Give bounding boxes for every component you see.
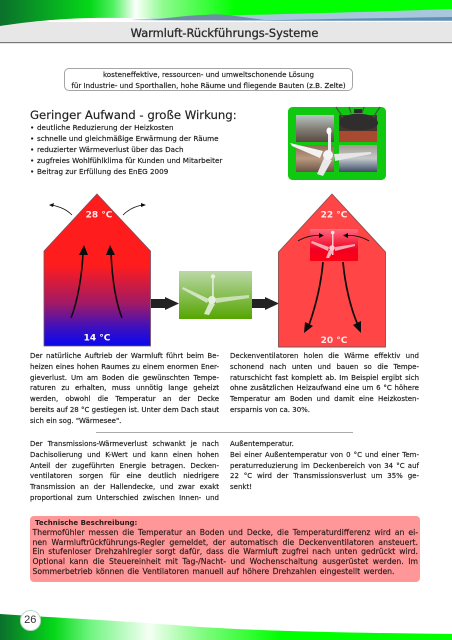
fan box: [179, 271, 252, 319]
benefits list: •: [30, 145, 34, 154]
header band: [0, 0, 452, 44]
footer band: [0, 614, 452, 640]
text block: ceiling fans: ersparnis von ca. 30%.: [230, 406, 310, 414]
benefits list: Beitrag zur Erfüllung des EnEG 2009: [37, 166, 168, 176]
panel: technical description: Thermofühler messen die Temperatur an Boden und Decke, die Temperaturdifferenz wird an ei-: [32, 528, 418, 537]
text block: natural updraft: [30, 352, 219, 425]
text block: outside temperature: [230, 440, 420, 491]
arrow to fan: [151, 297, 179, 310]
title: Warmluft-Rückführungs-Systeme: [131, 26, 318, 40]
benefits list: •: [30, 134, 34, 143]
benefits list: •: [30, 123, 34, 132]
text block: ceiling fans: raturschicht fast komplett ab. Im Beispiel ergibt sich: [230, 374, 419, 382]
benefits list: schnelle und gleichmäßige Erwärmung der Räume: [37, 134, 219, 143]
benefits list: deutliche Reduzierung der Heizkosten: [37, 123, 174, 132]
left house: 28 °C: [86, 210, 113, 220]
text block: outside temperature: Bei einer Außentemperatur von 0 °C und einer Tem-: [230, 451, 419, 459]
text block: natural updraft: bereits auf 28 °C gestiegen ist. Unter dem Dach staut: [30, 406, 219, 414]
text block: natural updraft: heizen eines hohen Raumes zu einem enormen Ener-: [30, 363, 219, 371]
benefits list: •: [30, 156, 34, 164]
diagram: airflow comparison: [44, 194, 386, 348]
text block: natural updraft: werden, obwohl die Temperatur an der Decke: [30, 395, 219, 403]
left house: [44, 194, 150, 346]
text block: ceiling fans: Temperatur am Boden und damit eine Heizkosten-: [230, 395, 419, 403]
panel heading: Technische Beschreibung:: [35, 519, 137, 527]
panel: technical description: Ein stufenloser Drehzahlregler sorgt dafür, dass die Warmluft zugfrei nach unten gedrückt wird.: [32, 547, 418, 556]
text block: natural updraft: Der natürliche Auftrieb der Warmluft führt beim Be-: [30, 352, 219, 360]
panel: technical description: Sommerbetrieb können die Ventilatoren manuell auf höhere Drehzahlen eingestellt werden.: [32, 567, 394, 576]
benefits list: reduzierter Wärmeverlust über das Dach: [37, 145, 184, 154]
text block: natural updraft: gieverlust. Um am Boden die gewünschten Tempe-: [30, 374, 219, 382]
panel: technical description: [30, 516, 420, 582]
text block: transmission loss: ventilatoren sorgen für eine deutlich niedrigere: [30, 472, 219, 480]
text block: outside temperature: peraturreduzierung im Deckenbereich von 34 °C auf: [230, 462, 419, 470]
left house: 14 °C: [84, 334, 111, 344]
right house: [278, 194, 386, 347]
text block: outside temperature: Außentemperatur.: [230, 440, 294, 448]
benefits list: •: [30, 166, 34, 176]
text block: natural updraft: raturen zu erhalten, muss unnötig lange geheizt: [30, 384, 219, 392]
text block: transmission loss: [30, 440, 219, 502]
benefits list: zugfreies Wohlfühlklima für Kunden und Mitarbeiter: [37, 156, 222, 164]
text block: ceiling fans: Deckenventilatoren holen die Wärme effektiv und: [230, 352, 419, 360]
text block: transmission loss: Dachisolierung und K-Wert und kann einen hohen: [30, 451, 219, 459]
text block: ceiling fans: ohne zusätzlichen Heizaufwand eine um 6 °C höhere: [230, 384, 419, 392]
panel: technical description: nen Warmluftrückführungs-Regler gemeldet, der automatisch die Deckenventilatoren ansteuert.: [32, 538, 418, 547]
text block: ceiling fans: [230, 352, 419, 414]
text block: outside temperature: senkt!: [230, 483, 252, 491]
right house: 20 °C: [321, 336, 348, 346]
page number: 26: [24, 614, 36, 626]
subtitle pill: [64, 68, 353, 91]
text block: transmission loss: Der Transmissions-Wärmeverlust schwankt je nach: [30, 440, 219, 448]
heading: benefits: Geringer Aufwand - große Wirkung:: [30, 108, 237, 122]
subtitle pill: kosteneffektive, ressourcen- und umweltschonende Lösung: [103, 70, 314, 79]
panel: technical description: Optional kann die Steuereinheit mit Tag-/Nacht- und Wochenschaltung ausgerüstet werden. Im: [32, 557, 418, 566]
text block: ceiling fans: schonend nach unten und bauen so die Tempe-: [230, 363, 419, 371]
text block: transmission loss: proportional zum Unterschied zwischen Innen- und: [30, 494, 219, 502]
benefits list: [30, 123, 222, 176]
arrow to right house: [252, 297, 279, 310]
text block: outside temperature: 22 °C wird der Transmissionsverlust um 35% ge-: [230, 472, 419, 480]
text block: transmission loss: Transmission an der Hallendecke, und zwar exakt: [30, 483, 219, 491]
page number: [20, 610, 40, 630]
text block: natural updraft: sich ein sog. "Wärmesee".: [30, 417, 121, 425]
subtitle pill: für Industrie- und Sporthallen, hohe Räume und fliegende Bauten (z.B. Zelte): [71, 81, 346, 90]
photo collage: [288, 106, 386, 180]
right house: 22 °C: [321, 210, 348, 220]
text block: transmission loss: Anteil der zugeführten Energie betragen. Decken-: [30, 462, 219, 470]
